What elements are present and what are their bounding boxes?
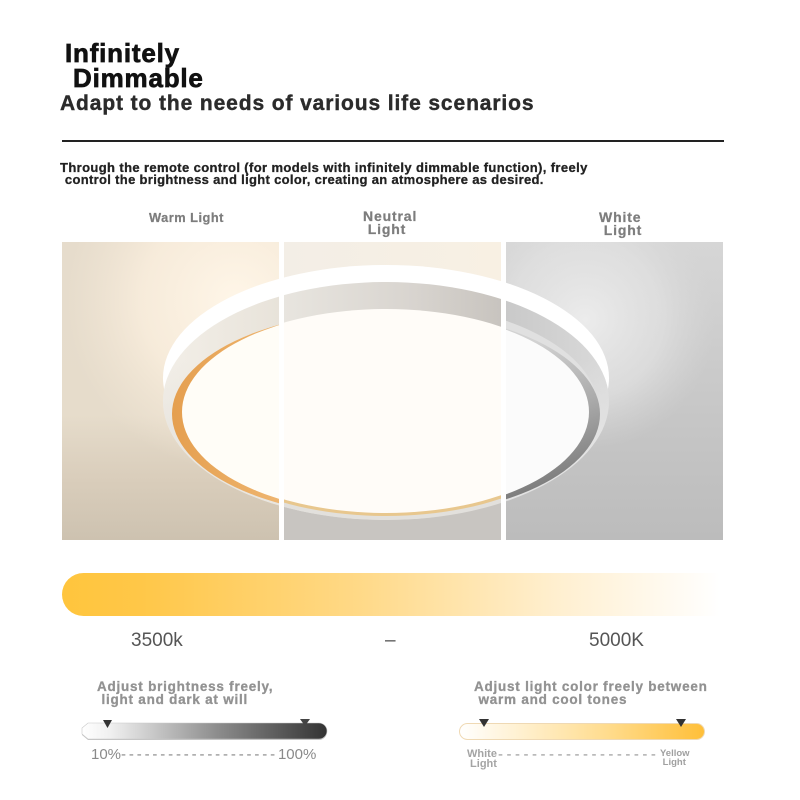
panel: neutral light bbox=[284, 242, 501, 540]
label: dash: – bbox=[385, 630, 396, 651]
title: Infinitely Dimmable bbox=[65, 38, 204, 93]
yellow light scale label: Yellow Light bbox=[660, 748, 690, 768]
label: neutral light: Neutral Light bbox=[363, 208, 417, 237]
white light scale label: White Light bbox=[467, 748, 497, 770]
description text: Through the remote control (for models with infinitely dimmable function), freely control the brightness and light color, creating an atmosphere as desired. bbox=[60, 160, 588, 187]
header divider bbox=[62, 140, 724, 142]
panel: warm light bbox=[62, 242, 279, 540]
panel: white light bbox=[506, 242, 723, 540]
label: 3500k: 3500k bbox=[131, 630, 183, 651]
scale dashes: ------------------- bbox=[498, 746, 659, 763]
subtitle: Adapt to the needs of various life scenarios bbox=[60, 92, 534, 114]
lamp comparison image bbox=[62, 242, 723, 540]
color tone slider bbox=[459, 719, 705, 740]
label: white light: White Light bbox=[599, 209, 642, 238]
color temperature gradient bar bbox=[62, 573, 720, 616]
brightness scale labels: 10%--------------------100% bbox=[91, 746, 316, 763]
label: 5000K: 5000K bbox=[589, 630, 644, 651]
label: warm light: Warm Light bbox=[149, 210, 224, 225]
brightness slider bbox=[82, 719, 328, 740]
brightness caption: Adjust brightness freely, light and dark at will bbox=[97, 679, 273, 707]
color tone caption: Adjust light color freely between warm and cool tones bbox=[474, 679, 708, 707]
